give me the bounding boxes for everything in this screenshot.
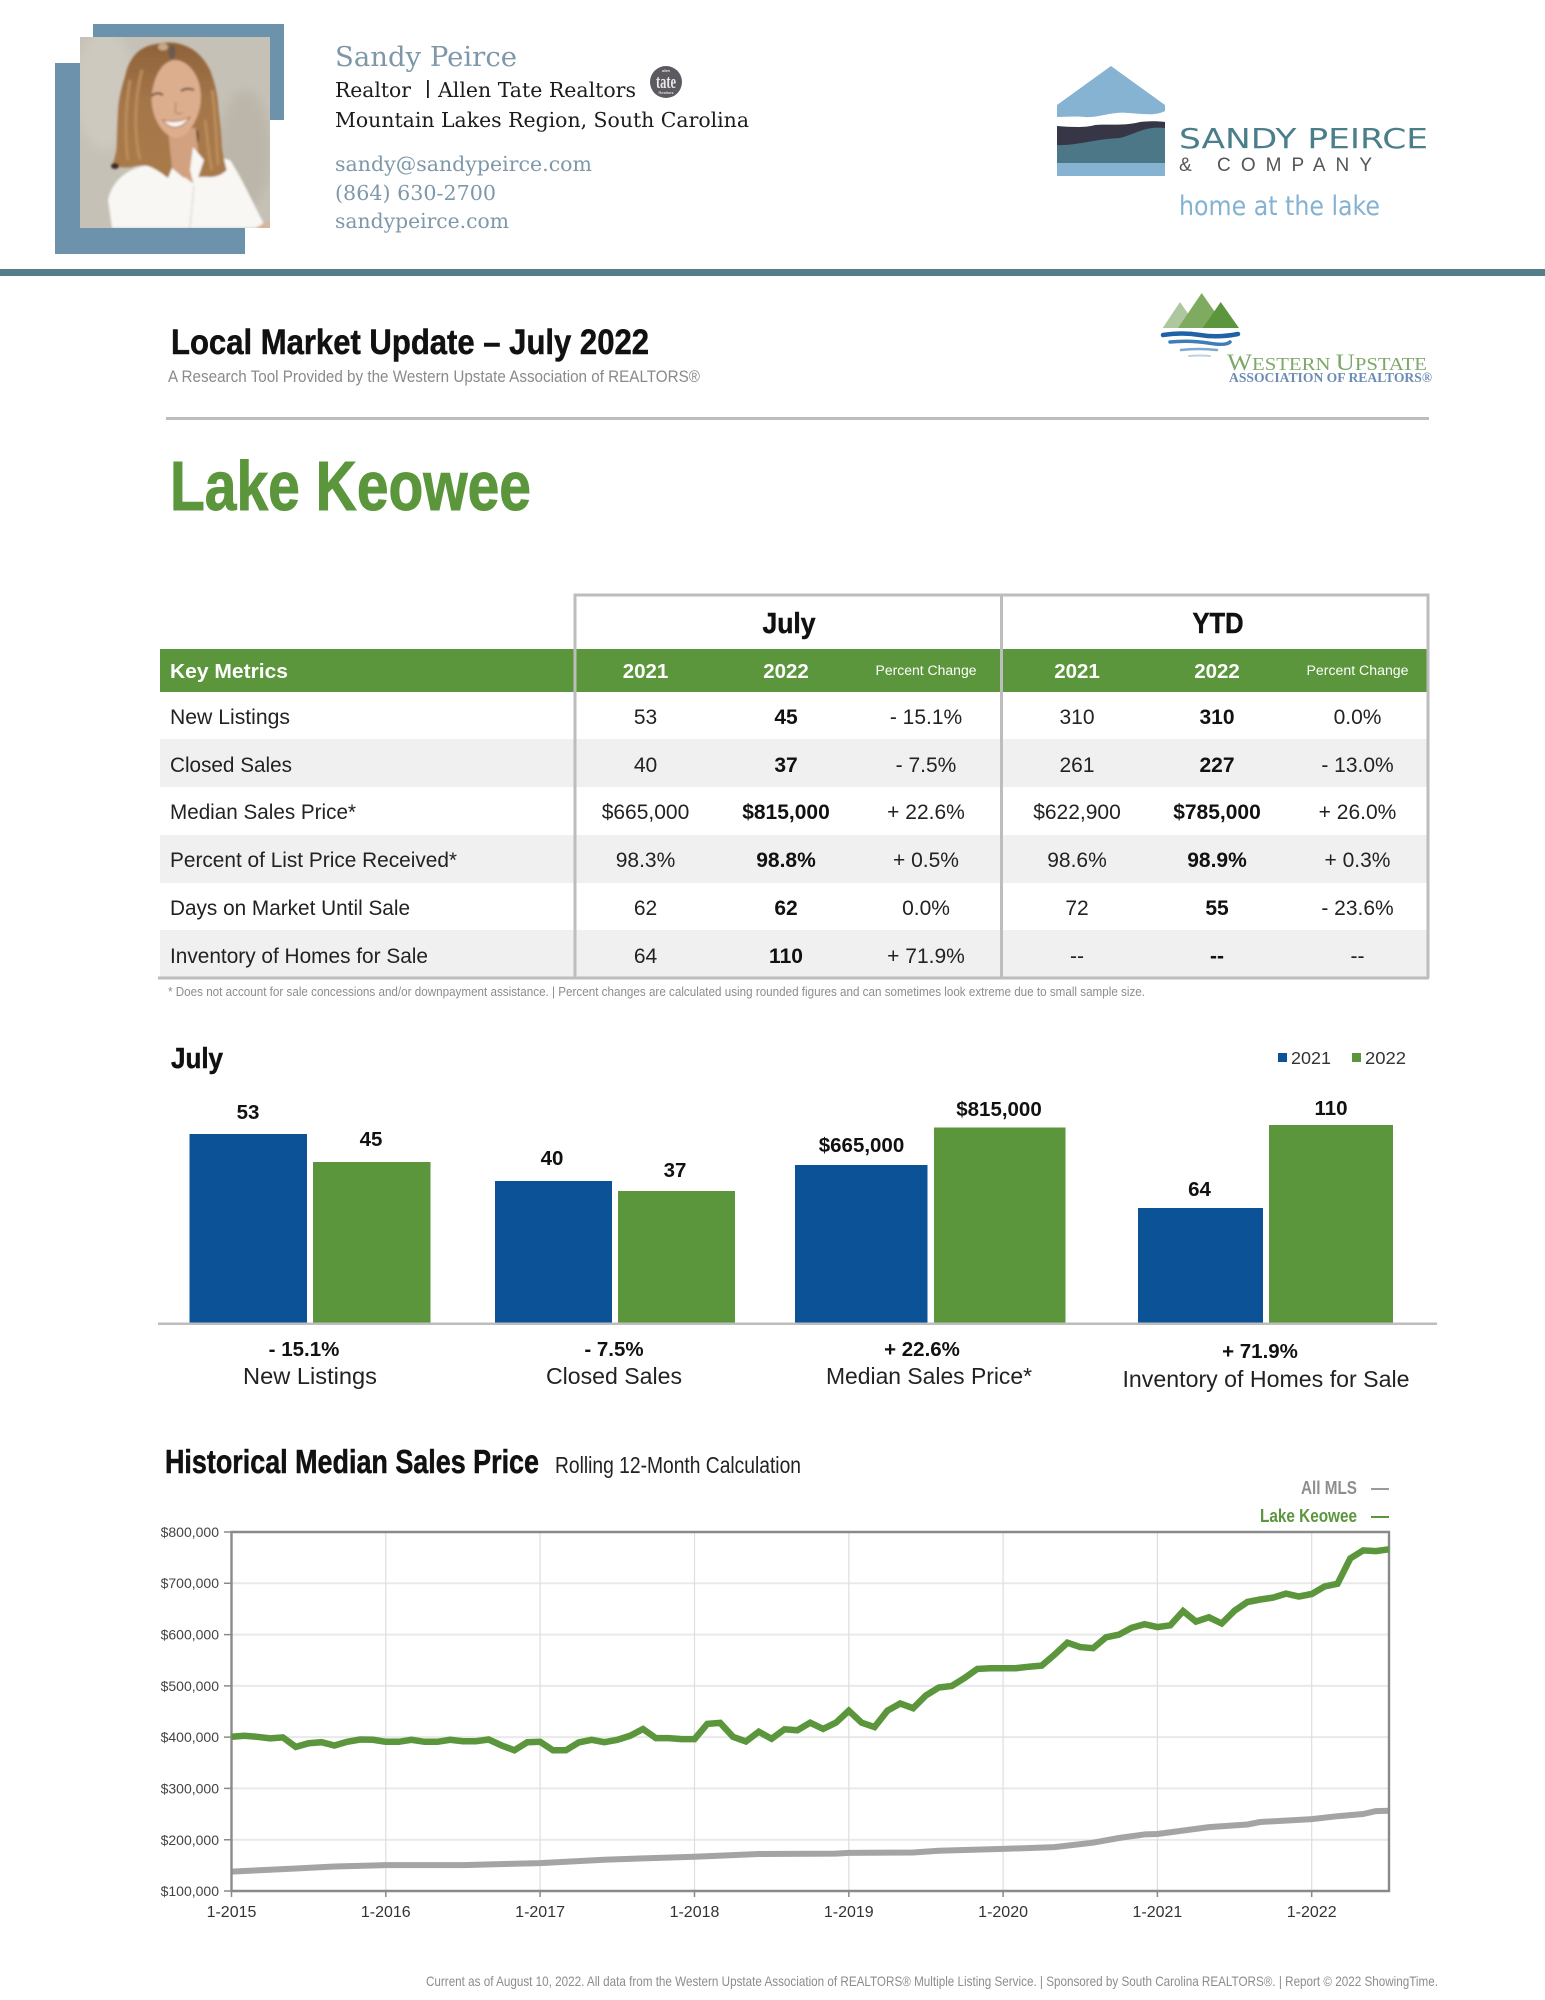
row: New Listings: 310 [1059,706,1095,729]
row: Inventory of Homes for Sale: -- [1350,945,1364,968]
legend: line chart series [1260,1478,1389,1526]
bars: Inventory of Homes for Sale [1138,1097,1393,1323]
column heading: July: July [762,608,816,640]
title rule [166,417,1429,420]
bars: Inventory of Homes for Sale: 110 [1314,1097,1348,1120]
category label: Inventory of Homes for Sale: + 71.9% [1222,1340,1298,1363]
header labels: 2022 [763,660,809,683]
row: Median Sales Price: Median Sales Price* [170,801,356,824]
legend: line chart series: All MLS [1301,1478,1357,1498]
legend: line chart series: Lake Keowee [1260,1506,1357,1526]
row: Percent of List Price Received: + 0.5% [893,849,959,872]
icon: Allen Tate badge [650,66,682,98]
row: Days on Market Until Sale: Days on Market Until Sale [170,897,410,920]
subheading: Rolling 12-Month Calculation: Rolling 12-Month Calculation [555,1452,801,1478]
axis ticks [224,1532,1312,1897]
table footnote: * Does not account for sale concessions and/or downpayment assistance. | Percent changes are calculated using rounded figures and can sometimes look extreme due to small sample size. [168,984,1145,999]
header labels [170,660,1408,683]
bar chart: July metrics [158,1097,1437,1392]
row: New Listings: New Listings [170,706,290,729]
agent title: Allen Tate Realtors [437,78,636,102]
logo: Sandy Peirce and Company: home at the lake [1179,191,1380,222]
bars: Inventory of Homes for Sale: 64 [1188,1178,1211,1201]
category label: New Listings: New Listings [243,1363,377,1389]
agent portrait photo [75,30,271,228]
row: Days on Market Until Sale: 62 [774,897,798,920]
category label: New Listings: - 15.1% [269,1338,339,1361]
agent name: Sandy Peirce [335,42,517,73]
y axis labels: $800,000 [161,1524,219,1540]
agent title [335,78,636,102]
heading: Historical Median Sales Price: Historical Median Sales Price [165,1443,539,1480]
row: Median Sales Price [170,801,1396,824]
category label: Closed Sales [546,1338,682,1389]
photo frame: top blue block [93,24,284,120]
row: Closed Sales: 37 [774,754,798,777]
header labels: Percent Change [876,663,976,678]
header labels: 2021 [1054,660,1100,683]
row: Median Sales Price: $785,000 [1173,801,1261,824]
x axis labels: 1-2019 [824,1904,874,1921]
row: Closed Sales: 40 [634,754,657,777]
table header row [160,649,1427,692]
category label: Median Sales Price: Median Sales Price* [826,1363,1032,1389]
row: Percent of List Price Received: Percent of List Price Received* [170,849,457,872]
bars: Median Sales Price [795,1098,1066,1323]
table frame [158,595,1429,978]
row: Percent of List Price Received: 98.6% [1047,849,1107,872]
category label: Median Sales Price [826,1338,1032,1389]
row: Inventory of Homes for Sale: 110 [769,945,803,968]
row: New Listings: 0.0% [1334,706,1381,729]
logo: Western Upstate Association of Realtors: WESTERN UPSTATE [1227,350,1427,375]
horizontal grid lines [231,1583,1389,1840]
heading: July bar chart: July [171,1043,223,1075]
bars: Closed Sales [495,1147,735,1323]
icon: Allen Tate badge: tate [656,72,676,93]
photo frame: bottom blue block [55,63,245,254]
row: New Listings [170,706,1381,729]
row: Percent of List Price Received: 98.3% [616,849,675,872]
line chart: historical median sales price [161,1524,1389,1921]
header divider band [0,269,1545,276]
bars: Closed Sales: 40 [541,1147,563,1170]
row: Percent of List Price Received: 98.9% [1187,849,1247,872]
category label: Inventory of Homes for Sale: Inventory of Homes for Sale [1122,1366,1410,1392]
logo: Sandy Peirce and Company [1057,66,1428,222]
vertical grid lines [386,1532,1312,1891]
row: Closed Sales: - 13.0% [1321,754,1394,777]
shaded rows [160,739,1427,977]
category label: Inventory of Homes for Sale [1122,1340,1410,1392]
row: Percent of List Price Received [170,849,1390,872]
x axis labels: 1-2022 [1287,1904,1337,1921]
y axis labels: $400,000 [161,1729,219,1745]
row: Median Sales Price: + 22.6% [887,801,965,824]
logo: Western Upstate Association of Realtors: ASSOCIATION OF REALTORS® [1229,371,1433,386]
row: Median Sales Price: $622,900 [1033,801,1121,824]
row: Percent of List Price Received: 98.8% [756,849,816,872]
row: New Listings: 45 [774,706,798,729]
agent title: Realtor [335,78,411,102]
row: Days on Market Until Sale: 72 [1065,897,1089,920]
row: Days on Market Until Sale: 0.0% [902,897,950,920]
agent phone: (864) 630-2700 [335,181,496,205]
row: Closed Sales: - 7.5% [896,754,956,777]
agent email: sandy@sandypeirce.com [335,152,592,176]
legend: bar chart years: 2021 [1291,1048,1331,1068]
y axis labels: $100,000 [161,1883,219,1899]
row: Percent of List Price Received: + 0.3% [1325,849,1390,872]
y axis labels: $200,000 [161,1832,219,1848]
x axis labels [207,1904,1337,1921]
category label: Median Sales Price: + 22.6% [884,1338,960,1361]
series: All MLS [232,1811,1389,1872]
y axis labels: $300,000 [161,1780,219,1796]
row: Inventory of Homes for Sale: 64 [634,945,657,968]
x axis labels: 1-2016 [361,1904,411,1921]
header labels: 2021 [623,660,668,683]
x axis labels: 1-2018 [670,1904,720,1921]
row: Inventory of Homes for Sale: -- [1070,945,1084,968]
row: Inventory of Homes for Sale: + 71.9% [887,945,965,968]
heading: Lake Keowee: Lake Keowee [170,447,531,525]
x axis labels: 1-2021 [1132,1904,1182,1921]
y axis labels: $500,000 [161,1678,219,1694]
panel: agent header [55,24,749,254]
category label: Closed Sales: - 7.5% [584,1338,644,1361]
x axis labels: 1-2015 [207,1904,257,1921]
agent website: sandypeirce.com [335,209,509,233]
x axis labels: 1-2017 [515,1904,565,1921]
panel: key metrics table [158,595,1429,978]
logo: Sandy Peirce and Company: & COMPANY [1179,155,1372,176]
row: Days on Market Until Sale [170,897,1394,920]
header labels: Key Metrics [170,660,288,683]
bars: Median Sales Price: $815,000 [956,1098,1042,1121]
row: Closed Sales: 261 [1059,754,1095,777]
row: Median Sales Price: $665,000 [602,801,689,824]
axis baseline [158,1322,1437,1325]
y axis labels: $700,000 [161,1575,219,1591]
category label: Closed Sales: Closed Sales [546,1363,682,1389]
agent region: Mountain Lakes Region, South Carolina [335,108,749,132]
row: Days on Market Until Sale: 62 [634,897,657,920]
category label: New Listings [243,1338,377,1389]
bars: New Listings: 53 [237,1101,259,1124]
bars: New Listings [190,1101,430,1323]
row: Inventory of Homes for Sale [170,945,1364,968]
row: Days on Market Until Sale: - 23.6% [1321,897,1394,920]
y axis labels [161,1524,219,1899]
subtitle: research tool: A Research Tool Provided by the Western Upstate Association of REALTORS® [168,367,700,386]
legend: bar chart years: 2022 [1365,1048,1406,1068]
header labels: 2022 [1194,660,1240,683]
row: Inventory of Homes for Sale: Inventory of Homes for Sale [170,945,428,968]
row: Closed Sales [170,754,1394,777]
x axis labels: 1-2020 [978,1904,1028,1921]
row: Closed Sales: 227 [1199,754,1235,777]
header labels: Percent Change [1306,663,1408,678]
y axis labels: $600,000 [161,1626,219,1642]
row: Closed Sales: Closed Sales [170,754,292,777]
row: New Listings: 53 [634,706,657,729]
row: Median Sales Price: + 26.0% [1319,801,1396,824]
row: Days on Market Until Sale: 55 [1205,897,1229,920]
bars: Closed Sales: 37 [664,1159,686,1182]
row: New Listings: - 15.1% [890,706,962,729]
plot frame [232,1532,1389,1891]
series: Lake Keowee [232,1549,1389,1750]
logo: Western Upstate Association of Realtors [1163,293,1433,386]
logo: Sandy Peirce and Company: SANDY PEIRCE [1179,122,1428,155]
row: New Listings: 310 [1199,706,1235,729]
icon: Allen Tate badge: allen [662,68,670,73]
row: Inventory of Homes for Sale: -- [1210,945,1224,968]
legend: bar chart years [1278,1048,1406,1068]
title: Local Market Update: Local Market Update – July 2022 [171,323,649,362]
bars: New Listings: 45 [360,1128,382,1151]
bars: Median Sales Price: $665,000 [819,1134,904,1157]
icon: Allen Tate badge: Realtors [659,90,673,95]
row: Median Sales Price: $815,000 [742,801,830,824]
column heading: YTD: YTD [1192,608,1244,640]
